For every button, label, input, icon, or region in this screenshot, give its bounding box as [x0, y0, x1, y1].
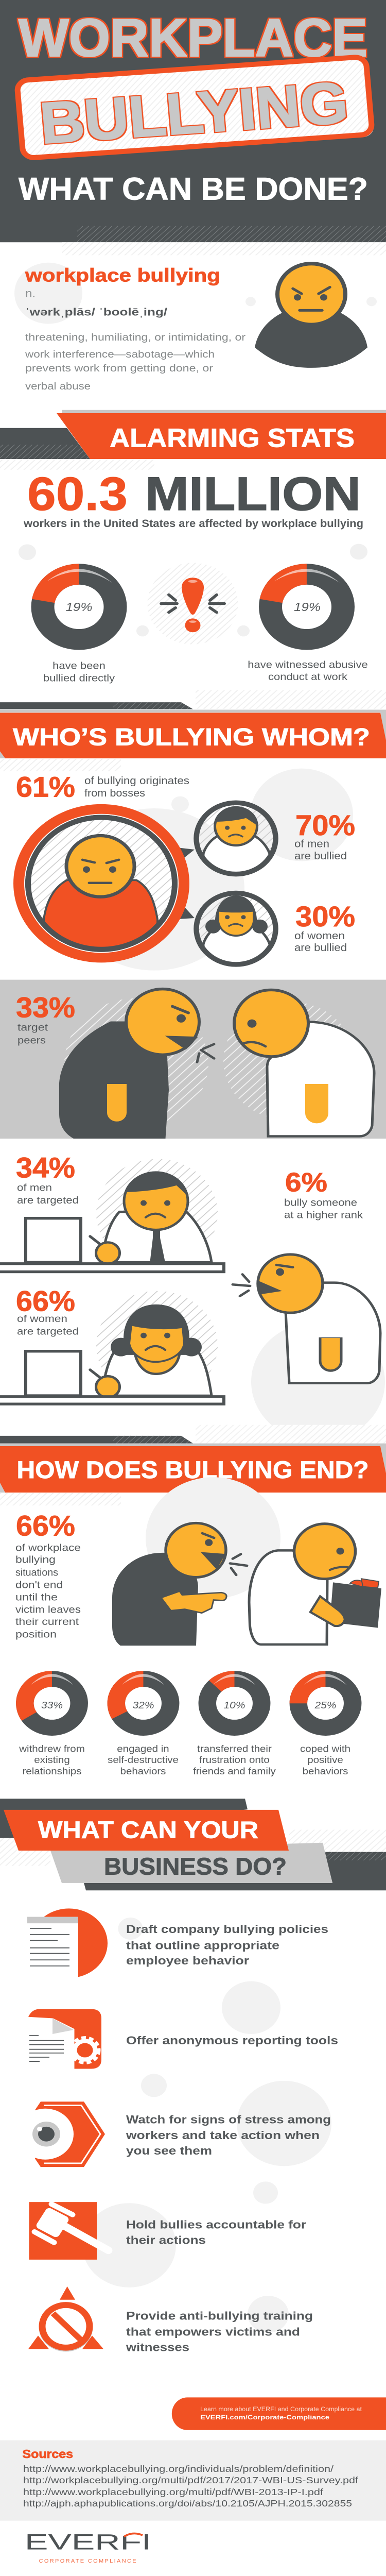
donut chart: self-destructive 32%: 32%	[133, 1700, 154, 1711]
stat: 30% of women: are bullied	[294, 941, 347, 954]
sources panel	[0, 2441, 386, 2521]
stat: 60.3 million: MILLION	[145, 467, 361, 520]
donut labels: friends and family	[193, 1766, 276, 1777]
icon: no bullying sign	[28, 2286, 103, 2349]
title: what can be done: WHAT CAN BE DONE?	[19, 171, 368, 207]
donut chart: withdrew 33%: 33%	[41, 1700, 63, 1711]
text: anti-bullying training	[126, 2310, 313, 2354]
icon: policy document	[27, 1908, 108, 1981]
sources panel: http://ajph.aphapublications.org/doi/abs/10.2105/AJPH.2015.302855	[23, 2499, 352, 2509]
text: draft policies: employee behavior	[126, 1954, 249, 1968]
figure: peer victim	[234, 990, 374, 1137]
figure: employee shouting upward	[233, 1255, 380, 1383]
text: draft policies	[126, 1923, 328, 1968]
text: watch for signs	[126, 2113, 331, 2158]
text: hold bullies accountable: Hold bullies accountable for	[126, 2218, 306, 2231]
stat: 6% bully higher rank: at a higher rank	[284, 1210, 363, 1221]
donut labels: positive	[307, 1755, 343, 1766]
banner: how does bullying end	[0, 1425, 386, 1505]
stat: 6% bully higher rank: bully someone	[284, 1197, 357, 1208]
icon: angry person	[255, 264, 367, 368]
stat: 66% until victim leaves: until the	[15, 1591, 58, 1603]
text: watch for signs: workers and take action when	[126, 2129, 320, 2142]
stat: 61% from bosses: 61%	[16, 771, 75, 803]
donut labels: coped with	[300, 1743, 350, 1754]
text: draft policies: that outline appropriate	[126, 1939, 279, 1952]
stat: 70% of men: are bullied	[294, 850, 347, 862]
logo: everfi: EVERFI	[25, 2531, 151, 2554]
donut chart: bullied directly 19%: 19%	[65, 601, 93, 614]
definition text: n.	[25, 286, 36, 299]
decorative circles: actions	[82, 1918, 331, 2333]
donut labels: existing	[34, 1755, 70, 1766]
stat: 30% of women	[294, 901, 355, 954]
stat: 61% from bosses: of bullying originates	[84, 774, 189, 787]
figure: woman at desk	[0, 1291, 224, 1404]
text: watch for signs: you see them	[126, 2144, 212, 2158]
donut chart: withdrew 33%	[14, 1670, 90, 1737]
call to action	[172, 2397, 386, 2430]
decorative circle: lower right	[251, 1321, 385, 1442]
banner: alarming stats: ALARMING STATS	[110, 423, 355, 453]
stat: 33% target peers: peers	[17, 1035, 46, 1046]
label: bullied directly	[43, 660, 115, 684]
definition text: ˈwərkˌplās/ ˈboolēˌing/	[25, 306, 167, 318]
stat: 70% of men: 70%	[295, 810, 355, 841]
banner: what can your business do	[0, 1799, 386, 1890]
text: anti-bullying training: Provide anti-bullying training	[126, 2310, 313, 2323]
decorative circles: who's bullying	[64, 769, 353, 971]
panel: peers	[0, 980, 386, 1139]
icon: reporting tools	[28, 2009, 101, 2069]
stat: 66% until victim leaves: of workplace	[15, 1543, 81, 1553]
stat: 33% target peers: target	[17, 1022, 48, 1033]
stat: 30% of women: of women	[294, 929, 345, 942]
label: bullied directly: bullied directly	[43, 673, 115, 684]
sources panel: http://www.workplacebullying.org/multi/pdf/WBI-2013-IP-I.pdf	[23, 2487, 324, 2498]
stat: 66% until victim leaves	[15, 1510, 81, 1640]
definition text: verbal abuse	[25, 381, 91, 392]
stat: 34% of men	[16, 1152, 79, 1206]
stat: 33% target peers	[16, 992, 75, 1046]
stat: 60.3 million: workers in the United States are affected by workplace bullying	[23, 517, 363, 530]
definition text: workplace bullying	[25, 265, 220, 286]
donut labels: relationships	[22, 1766, 82, 1777]
stat: 34% of men: 34%	[16, 1152, 75, 1184]
call to action: Learn more about EVERFI and Corporate Compliance at	[200, 2406, 362, 2413]
stat: 66% until victim leaves: don't end	[15, 1580, 63, 1590]
text: hold bullies accountable	[126, 2218, 306, 2247]
arrows: boss to employees	[167, 848, 195, 919]
stat: 70% of men: of men	[294, 838, 329, 850]
banner: who's bullying whom	[0, 690, 386, 771]
icon: gavel	[29, 2202, 108, 2260]
icon: man victim in circle	[197, 803, 276, 880]
icon: woman victim in circle	[197, 893, 276, 971]
donut labels: self-destructive	[108, 1755, 179, 1766]
stat: 66% until victim leaves: 66%	[16, 1510, 75, 1542]
donut labels: frustration onto	[199, 1755, 270, 1766]
text: anti-bullying training: that empowers victims and	[126, 2326, 300, 2338]
figure: bully peer	[59, 989, 214, 1139]
banner: who's bullying whom: WHO’S BULLYING WHOM?	[13, 723, 370, 751]
stat: 66% of women: 66%	[16, 1285, 75, 1317]
logo: everfi: CORPORATE COMPLIANCE	[39, 2558, 136, 2564]
stat: 34% of men: are targeted	[17, 1195, 79, 1206]
donut chart: transferred 10%: 10%	[224, 1700, 245, 1711]
title: bullying badge: BULLYING	[37, 70, 350, 156]
stat: 66% until victim leaves: position	[15, 1629, 57, 1640]
stat: 61% from bosses	[16, 771, 189, 803]
donut chart: coped 25%	[299, 1674, 353, 1727]
donut chart: transferred 10%	[196, 1669, 273, 1738]
stat: 60.3 million	[0, 460, 363, 530]
banner: how does bullying end: HOW DOES BULLYING END?	[16, 1456, 369, 1483]
stat: 33% target peers: 33%	[16, 992, 75, 1024]
call to action: EVERFI.com/Corporate-Compliance	[200, 2414, 329, 2421]
donut labels: behaviors	[303, 1766, 348, 1777]
figure: bully pointing	[112, 1523, 247, 1646]
logo: everfi	[25, 2531, 151, 2564]
sources panel: Sources	[23, 2448, 73, 2461]
donut labels: transferred their	[197, 1743, 272, 1754]
donut chart: witnessed 19%: 19%	[294, 601, 321, 614]
text: hold bullies accountable: their actions	[126, 2233, 206, 2247]
stat: 60.3 million: 60.3	[27, 467, 128, 520]
definition text: work interference—sabotage—which	[25, 349, 215, 360]
stat: 66% of women: are targeted	[17, 1326, 79, 1337]
definition text	[25, 265, 245, 392]
definition text: prevents work from getting done, or	[25, 363, 213, 374]
text: draft policies: Draft company bullying policies	[126, 1923, 328, 1936]
sources panel: http://www.workplacebullying.org/individuals/problem/definition/	[23, 2464, 334, 2475]
label: witnessed abusive conduct: have witnessed abusive	[248, 659, 368, 670]
header background	[0, 0, 386, 255]
icon: boss in circle	[19, 809, 184, 973]
banner: what can your business do: WHAT CAN YOUR	[38, 1817, 258, 1843]
decorative circle: bullying end	[146, 1477, 280, 1599]
donut labels: withdrew from	[19, 1743, 85, 1754]
figure: victim packing up	[249, 1524, 381, 1645]
stat: 30% of women: 30%	[295, 901, 355, 933]
banner: what can your business do: BUSINESS DO?	[104, 1853, 287, 1880]
figure: man at desk	[0, 1159, 224, 1272]
stat: 66% until victim leaves: victim leaves	[15, 1604, 81, 1615]
donut chart: self-destructive 32%	[107, 1670, 180, 1736]
stat: 66% until victim leaves: situations	[15, 1567, 58, 1578]
stat: 6% bully higher rank: 6%	[285, 1167, 327, 1197]
donut labels: engaged in	[117, 1743, 169, 1754]
stat: 66% of women: of women	[17, 1313, 67, 1325]
label: witnessed abusive conduct	[248, 659, 368, 683]
stat: 66% until victim leaves: their current	[15, 1616, 79, 1628]
donut chart: bullied directly 19%	[37, 569, 121, 645]
donut labels: behaviors	[120, 1766, 166, 1777]
label: witnessed abusive conduct: conduct at work	[268, 671, 348, 683]
stat: 61% from bosses: from bosses	[84, 787, 145, 799]
label: bullied directly: have been	[52, 660, 106, 671]
banner: alarming stats	[0, 410, 386, 459]
icon: exclamation mark	[147, 563, 238, 645]
stat: 66% of women	[16, 1285, 79, 1337]
donut labels	[19, 1743, 350, 1777]
sources panel: http://workplacebullying.org/multi/pdf/2017/2017-WBI-US-Survey.pdf	[23, 2476, 359, 2486]
stat: 70% of men	[294, 810, 355, 862]
stat: 34% of men: of men	[17, 1182, 52, 1193]
text: anonymous reporting: Offer anonymous reporting tools	[126, 2034, 338, 2047]
text: anti-bullying training: witnesses	[126, 2341, 189, 2354]
decorative circles: definition	[14, 263, 377, 324]
definition text: threatening, humiliating, or intimidating, or	[25, 332, 245, 343]
stat: 6% bully higher rank	[284, 1167, 363, 1221]
text: watch for signs: Watch for signs of stress among	[126, 2113, 331, 2126]
icon: eye	[17, 2102, 105, 2167]
decorative circles: stats	[19, 544, 367, 636]
donut chart: witnessed 19%	[265, 569, 349, 645]
stat: 66% until victim leaves: bullying	[15, 1554, 56, 1565]
donut chart: coped 25%: 25%	[314, 1700, 336, 1711]
